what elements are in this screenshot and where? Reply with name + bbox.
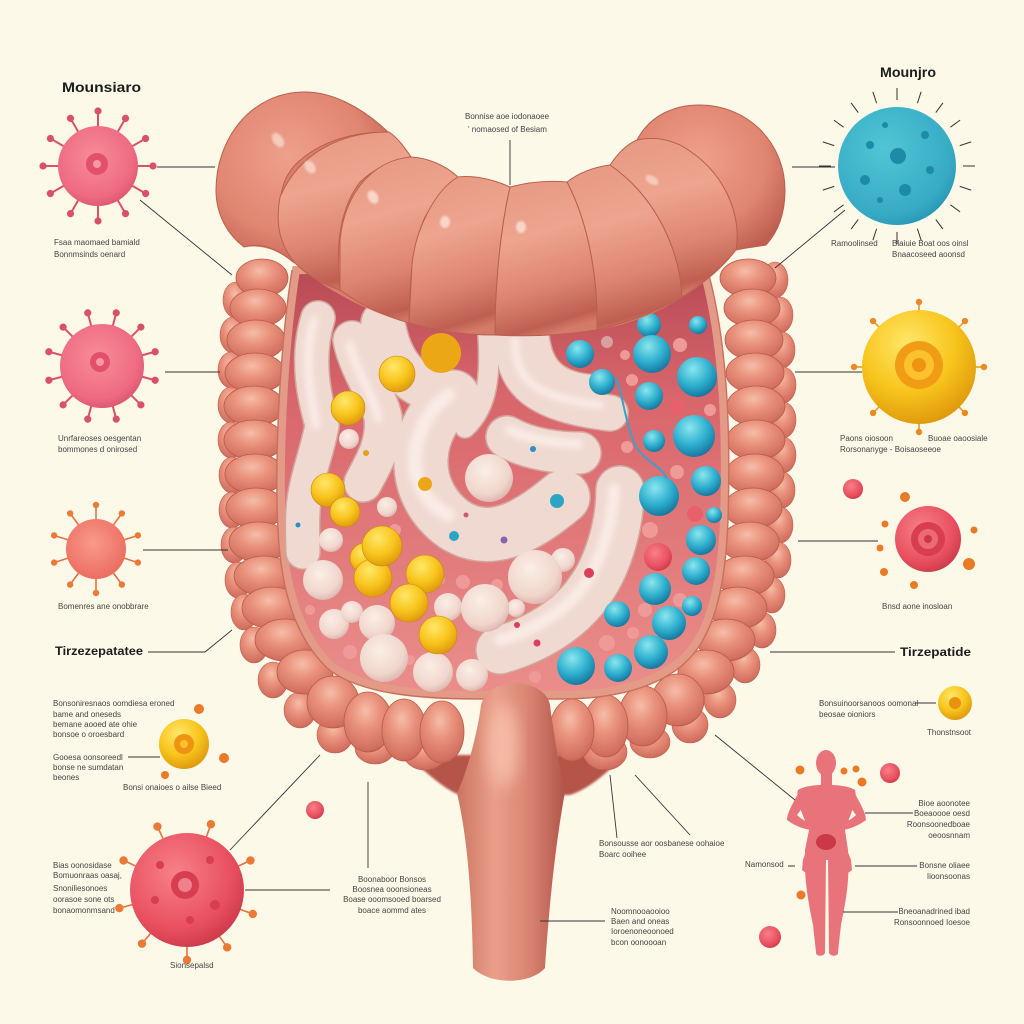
label: figure left: Namonsod xyxy=(745,860,784,869)
label: virus 1: Fsaa maomaed bamiald xyxy=(54,238,140,247)
label: virus 2: bommones d onirosed xyxy=(58,445,137,454)
colon highlights xyxy=(269,131,660,233)
transverse colon xyxy=(216,92,785,336)
cell: blue xyxy=(819,88,975,244)
leader lines xyxy=(128,140,936,921)
label: top centre: Bonnise aoe iodonaoee xyxy=(465,112,550,121)
label: under yellow cell: Bonsi onaioes o ailse Bieed xyxy=(123,783,221,792)
label: left sub paragraph: Gooesa oonsoreedl xyxy=(53,753,123,762)
colon base xyxy=(216,92,785,335)
label: rectum: Noomnooaooioo xyxy=(611,907,670,916)
label: bottom left: Bias oonosidase xyxy=(53,861,112,870)
cell: yellow left xyxy=(159,704,229,779)
tube bodies xyxy=(303,318,620,650)
cell: large red bottom left xyxy=(114,801,324,964)
virus: middle left pink xyxy=(44,308,160,424)
label: left paragraph: bemane aooed ate ohie xyxy=(53,720,138,729)
cell: small yellow right xyxy=(938,686,972,720)
label: blue cell: Bnaacoseed aoonsd xyxy=(892,250,965,259)
cavity tissue dots xyxy=(305,336,716,683)
label: yellow cell: Buoae oaoosiale xyxy=(928,434,988,443)
label: bottom left: Bomuonraas oasaj, xyxy=(53,871,122,880)
label: bottom left: oorasoe sone ots xyxy=(53,895,114,904)
large intestine side walls xyxy=(218,259,796,770)
small intestine tubes xyxy=(303,318,620,650)
heading: top right: Mounjro xyxy=(880,64,936,80)
label: figure lower: Bneoanadrined ibad xyxy=(898,907,970,916)
cell: red with orange dots xyxy=(843,479,978,589)
label: figure upper: oeoosnnam xyxy=(928,831,970,840)
label: top centre: ' nomaosed of Besiam xyxy=(468,125,547,134)
label: virus 1: Bonnmsinds oenard xyxy=(54,250,125,259)
white spheres xyxy=(303,429,575,692)
label: figure upper: Bioe aoonotee xyxy=(918,799,971,808)
label: left paragraph: bonsoe o oroesbard xyxy=(53,730,124,739)
label: virus 3: Bomenres ane onobbrare xyxy=(58,602,149,611)
segment 4 xyxy=(409,177,510,335)
colon shadow near rectum xyxy=(405,755,625,795)
label: small yellow caption: Thonstnsoot xyxy=(927,728,972,737)
label: small yellow cell: beosae oioniors xyxy=(819,710,875,719)
label: figure middle: Iioonsoonas xyxy=(927,872,970,881)
orange sphere xyxy=(421,333,461,373)
label: red cell: Bnsd aone inosloan xyxy=(882,602,952,611)
label: bottom centre: boace aommd ates xyxy=(358,906,426,915)
label: blue cell: Blaiuie Boat oos oinsl xyxy=(892,239,969,248)
heading: top left: Mounsiaro xyxy=(62,79,141,95)
label: yellow cell: Paons oiosoon xyxy=(840,434,893,443)
segment 7 xyxy=(610,138,737,297)
label: yellow cell: Rorsonanyge - Boisaoseeoe xyxy=(840,445,942,454)
tube highlights xyxy=(308,320,614,640)
label: left sub paragraph: bonse ne sumdatan xyxy=(53,763,123,772)
label: rectum: bcon oonoooan xyxy=(611,938,666,947)
rectum xyxy=(457,683,565,981)
blue vessel xyxy=(617,378,667,478)
label: left sub paragraph: beones xyxy=(53,773,79,782)
label: bottom centre: Boase ooomsooed boarsed xyxy=(343,895,441,904)
cell: yellow xyxy=(851,299,987,435)
cavity rim line xyxy=(277,270,729,699)
tube outlines xyxy=(303,318,620,650)
heading: right middle: Tirzepatide xyxy=(900,645,971,659)
right lobe xyxy=(637,105,785,250)
label: rectum: Ioroenoneoonoed xyxy=(611,927,674,936)
label: blue cell: Ramoolinsed xyxy=(831,239,878,248)
label: bottom centre: Boosnea ooonsioneas xyxy=(352,885,432,894)
yellow spheres xyxy=(311,356,457,654)
label: virus 2: Unrfareoses oesgentan xyxy=(58,434,141,443)
human figure xyxy=(787,750,866,956)
segment 2 xyxy=(278,132,411,290)
label: small yellow cell: Bonsuinoorsanoos oomonal xyxy=(819,699,918,708)
label: bottom left: Snoniliesonoes xyxy=(53,884,107,893)
label: under red cell: Sionsepalsd xyxy=(170,961,214,970)
label: left paragraph: Bonsoniresnaos oomdiesa eroned xyxy=(53,699,174,708)
label: bottom centre right: Boarc ooihee xyxy=(599,850,647,859)
rectum highlight xyxy=(488,703,518,787)
blue spheres xyxy=(557,313,722,685)
label: left paragraph: bame and oneseds xyxy=(53,710,121,719)
segment 5 xyxy=(495,181,597,336)
virus: orange coral xyxy=(50,502,142,596)
left lobe xyxy=(216,92,389,262)
segment 3 xyxy=(340,157,458,323)
label: figure lower: Ronsoonnoed Ioesoe xyxy=(894,918,971,927)
label: figure upper: Roonsoonedboae xyxy=(907,820,971,829)
tiny dots on tubes xyxy=(296,446,594,646)
label: figure middle: Bonsne oliaee xyxy=(919,861,971,870)
label: bottom centre: Boonaboor Bonsos xyxy=(358,875,426,884)
abdominal cavity xyxy=(281,270,725,695)
figure side cells xyxy=(759,763,900,948)
label: bottom left: bonaomonmsand xyxy=(53,906,115,915)
label: rectum: Baen and oneas xyxy=(611,917,669,926)
heading: left middle: Tirzezepatatee xyxy=(55,644,143,658)
label: bottom centre right: Bonsousse aor oosbanese oohaioe xyxy=(599,839,725,848)
label: figure upper: Boeaoooe oesd xyxy=(914,809,970,818)
red cavity sphere xyxy=(644,543,672,571)
segment 6 xyxy=(567,165,682,330)
virus: top left pink xyxy=(39,107,157,225)
